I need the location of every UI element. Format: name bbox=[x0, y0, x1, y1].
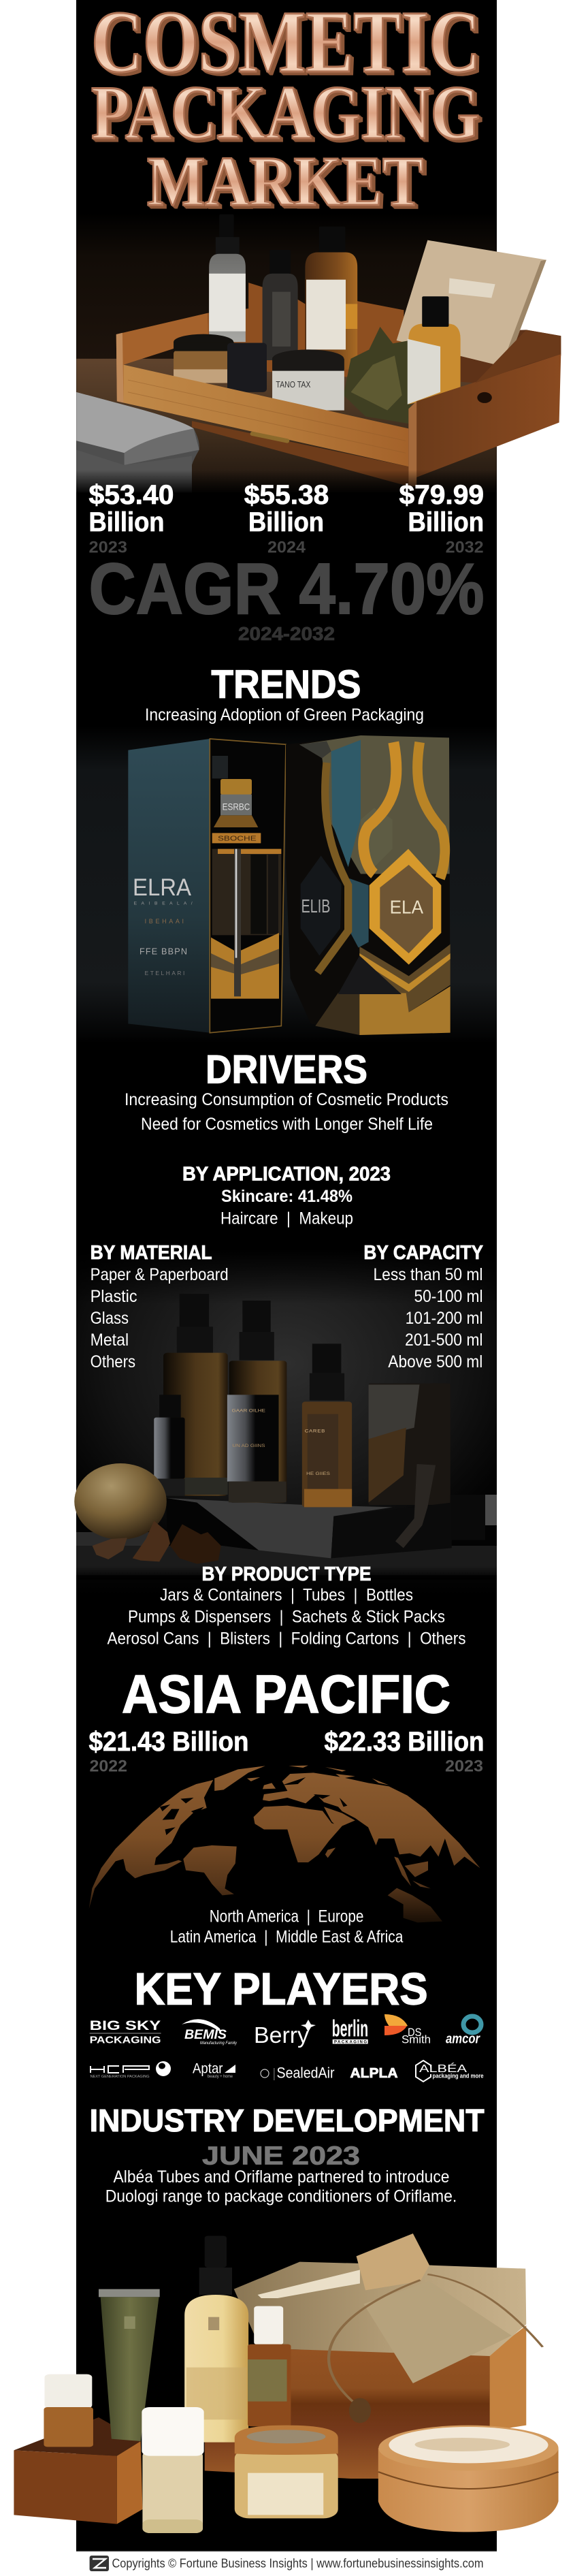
logo: Albea: ALBÉA bbox=[419, 2062, 467, 2075]
by material list: Others bbox=[91, 1352, 135, 1371]
by material list: Plastic bbox=[91, 1287, 137, 1306]
title: Cosmetic Packaging Market: PACKAGING bbox=[91, 71, 480, 155]
logo: Berlin Packaging: PACKAGING bbox=[334, 2040, 367, 2044]
jar bbox=[235, 2426, 338, 2518]
box side with label: FFE BBPN bbox=[140, 947, 187, 957]
open interior with bottle: ESRBC bbox=[223, 801, 250, 812]
industry development heading: INDUSTRY DEVELOPMENT bbox=[90, 2103, 485, 2138]
logo: Big Sky Packaging: BIG SKY bbox=[90, 2019, 161, 2033]
logo: Sealed Air: SealedAir bbox=[276, 2065, 335, 2081]
by product type: BY PRODUCT TYPE bbox=[201, 1563, 372, 1585]
panel bottom line bbox=[76, 2551, 497, 2552]
date: JUNE 2023 bbox=[202, 2142, 360, 2171]
by product type: Pumps & Dispensers | Sachets & Stick Packs bbox=[128, 1607, 445, 1626]
amber dropper bottle bbox=[248, 2306, 291, 2426]
value 2023: $53.40 bbox=[88, 480, 174, 510]
title: Cosmetic Packaging Market: MARKET bbox=[147, 142, 423, 221]
round wooden box bbox=[378, 2426, 559, 2532]
trends heading: TRENDS bbox=[211, 663, 361, 707]
open interior with bottle bbox=[210, 739, 286, 1033]
value 2032: Billion bbox=[408, 507, 484, 537]
regional values: $22.33 Billion bbox=[324, 1727, 485, 1757]
small amber bottle bbox=[44, 2374, 93, 2447]
hero image: wooden tray with cosmetic bottles: TANO TAX bbox=[276, 379, 310, 389]
logo: Bemis: BEMIS bbox=[184, 2028, 227, 2042]
by material list: BY MATERIAL bbox=[91, 1242, 212, 1264]
regional values bbox=[88, 1727, 485, 1776]
other regions: North America | Europe bbox=[210, 1907, 363, 1926]
box side with label: E A I B E A L A / bbox=[134, 902, 193, 906]
development text: Albéa Tubes and Oriflame partnered to introduce bbox=[113, 2167, 449, 2187]
white capped tube bbox=[142, 2407, 204, 2533]
box side with label: ETELHARI bbox=[145, 970, 184, 976]
product photo: dark bottles on stone: CAREB bbox=[305, 1428, 325, 1433]
development text bbox=[105, 2167, 457, 2206]
key players heading: KEY PLAYERS bbox=[135, 1964, 428, 2014]
by capacity list: 101-200 ml bbox=[406, 1309, 483, 1328]
value 2024: Billion bbox=[248, 507, 324, 537]
logo: DS Smith: DS bbox=[408, 2026, 422, 2039]
logo: Aptar bbox=[193, 2061, 235, 2079]
value 2024 bbox=[244, 480, 329, 557]
tall yellow bottle bbox=[184, 2236, 248, 2443]
by application: Skincare: 41.48% bbox=[221, 1187, 353, 1206]
box side with label bbox=[128, 739, 210, 1033]
by capacity list: 201-500 ml bbox=[405, 1331, 483, 1350]
product photo: dark bottles on stone: HE GIIES bbox=[306, 1471, 330, 1476]
regional values: $21.43 Billion bbox=[88, 1727, 249, 1757]
gift box bbox=[205, 2233, 542, 2479]
product photo: dark bottles on stone: GAAR OILHE bbox=[232, 1408, 265, 1413]
logo: Bemis bbox=[182, 2019, 238, 2046]
value 2023: Billion bbox=[88, 507, 165, 537]
regional values: 2022 bbox=[90, 1757, 127, 1776]
box side with label: IBEHAAI bbox=[145, 918, 184, 925]
by material list: Glass bbox=[91, 1309, 129, 1328]
by capacity list: Above 500 ml bbox=[388, 1352, 482, 1371]
value 2032: 2032 bbox=[446, 538, 484, 557]
logo: DS Smith bbox=[384, 2014, 431, 2046]
hero image: wooden tray with cosmetic bottles bbox=[76, 212, 561, 494]
patterned wrap bbox=[286, 735, 451, 1035]
company logos bbox=[90, 2014, 484, 2082]
market values bbox=[88, 480, 484, 557]
logo: Bemis: Manufacturing Family bbox=[200, 2041, 238, 2046]
asia pacific heading: ASIA PACIFIC bbox=[122, 1664, 451, 1724]
other regions: Latin America | Middle East & Africa bbox=[170, 1927, 403, 1946]
open interior with bottle: SBOCHE bbox=[218, 836, 257, 843]
by application: BY APPLICATION, 2023 bbox=[182, 1163, 391, 1185]
by capacity list: 50-100 ml bbox=[414, 1287, 483, 1306]
box side with label: ELRA bbox=[133, 874, 192, 901]
page background panel bbox=[76, 0, 497, 2551]
logo: Berlin Packaging bbox=[332, 2016, 368, 2044]
value 2032 bbox=[399, 480, 484, 557]
by capacity list: Less than 50 ml bbox=[373, 1265, 483, 1284]
logo: Aptar: beauty + home bbox=[208, 2075, 233, 2079]
value 2024: $55.38 bbox=[244, 480, 329, 510]
logo: Amcor: amcor bbox=[446, 2032, 480, 2047]
logo: Berry: Berry bbox=[254, 2022, 310, 2048]
logo: Albea: packaging and more bbox=[433, 2073, 483, 2080]
title: Cosmetic Packaging Market bbox=[91, 0, 480, 221]
other regions bbox=[170, 1907, 403, 1946]
logo: DS Smith: Smith bbox=[402, 2033, 431, 2046]
logo: Albea bbox=[416, 2061, 483, 2082]
logo: Alpla: ALPLA bbox=[350, 2066, 397, 2081]
value 2023 bbox=[88, 480, 174, 557]
by capacity list: BY CAPACITY bbox=[363, 1242, 483, 1264]
logo: Big Sky Packaging: PACKAGING bbox=[90, 2035, 161, 2046]
by material list: Metal bbox=[91, 1331, 129, 1350]
drivers text bbox=[125, 1090, 448, 1134]
development text: Duologi range to package conditioners of Oriflame. bbox=[105, 2187, 457, 2206]
regional values: 2023 bbox=[445, 1757, 483, 1776]
wood block bbox=[14, 2417, 142, 2524]
by application bbox=[182, 1163, 391, 1228]
logo: HCP bbox=[91, 2061, 171, 2079]
value 2023: 2023 bbox=[88, 538, 127, 557]
by product type: Aerosol Cans | Blisters | Folding Cartons | Others bbox=[108, 1629, 465, 1648]
by material list: Paper & Paperboard bbox=[91, 1265, 229, 1284]
by product type bbox=[108, 1563, 465, 1648]
logo: HCP: NEXT GENERATION PACKAGING bbox=[91, 2075, 150, 2079]
footer: copyright: Copyrights © Fortune Business Insights | www.fortunebusinessinsights.com bbox=[112, 2556, 483, 2570]
green tube bbox=[99, 2289, 160, 2441]
bottom image: natural cosmetic products and wooden box bbox=[14, 2233, 559, 2533]
logo: Aptar: Aptar bbox=[193, 2061, 223, 2077]
CAGR period: 2024-2032 bbox=[238, 623, 335, 644]
trends image: luxury packaging box bbox=[76, 726, 497, 1049]
drivers text: Increasing Consumption of Cosmetic Products bbox=[125, 1090, 448, 1109]
product photo: dark bottles on stone: UN AD GIINS bbox=[232, 1443, 265, 1448]
patterned wrap: ELA bbox=[390, 897, 423, 918]
drivers heading: DRIVERS bbox=[206, 1047, 367, 1092]
value 2024: 2024 bbox=[267, 538, 306, 557]
by product type: Jars & Containers | Tubes | Bottles bbox=[160, 1585, 413, 1604]
logo: Amcor bbox=[446, 2016, 481, 2047]
globe map bbox=[89, 1766, 480, 1922]
by capacity list bbox=[363, 1242, 483, 1371]
logo: Big Sky Packaging bbox=[90, 2019, 161, 2046]
icon: Fortune Business Insights logo bbox=[90, 2556, 109, 2571]
by application: Haircare | Makeup bbox=[220, 1209, 353, 1228]
trends text: Increasing Adoption of Green Packaging bbox=[145, 705, 424, 725]
patterned wrap: ELIB bbox=[301, 895, 330, 917]
by material list bbox=[91, 1242, 229, 1371]
value 2032: $79.99 bbox=[399, 480, 484, 510]
drivers text: Need for Cosmetics with Longer Shelf Life bbox=[141, 1115, 433, 1134]
CAGR headline: CAGR 4.70% bbox=[88, 549, 485, 629]
logo: Berlin Packaging: berlin bbox=[332, 2016, 368, 2041]
product photo: dark bottles on stone bbox=[74, 1250, 497, 1595]
